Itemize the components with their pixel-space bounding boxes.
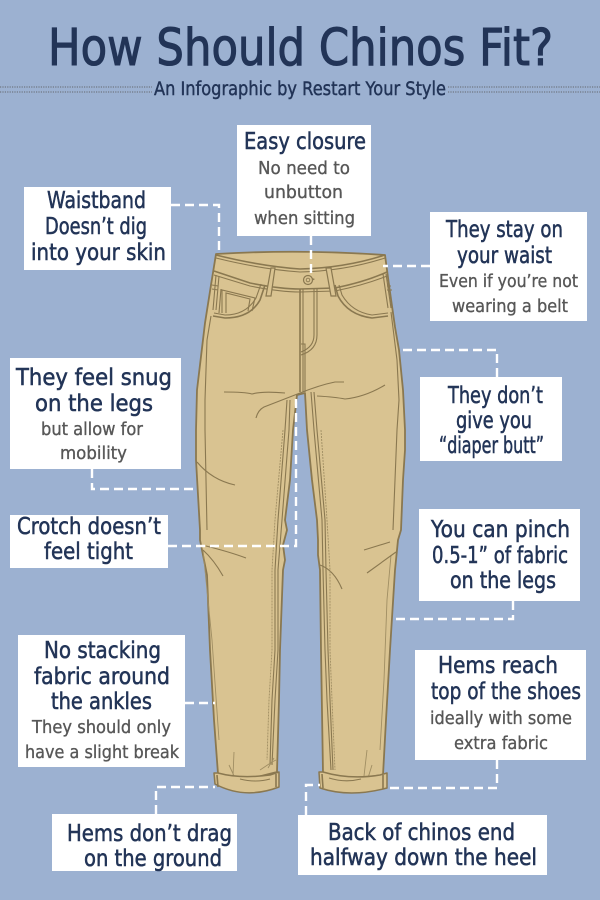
- fly: [299, 289, 301, 392]
- callout: hems don't drag: on the ground: [84, 844, 222, 872]
- callout: easy closure: No need to: [258, 158, 350, 179]
- callout: crotch: Crotch doesn’t: [17, 512, 161, 540]
- callout: easy closure: [237, 125, 371, 236]
- callout: hems reach: extra fabric: [454, 733, 548, 754]
- callout: no stacking: have a slight break: [25, 742, 180, 763]
- callout: hems reach: [415, 650, 586, 760]
- callout: snug on the legs: on the legs: [35, 389, 153, 417]
- callout: no stacking: the ankles: [51, 687, 152, 715]
- callout: snug on the legs: mobility: [60, 443, 127, 464]
- callout: diaper butt: give you: [456, 406, 532, 434]
- button: [304, 276, 315, 284]
- right leg inseam stitching: [311, 392, 331, 770]
- callout: snug on the legs: [10, 358, 181, 469]
- callout: stay on waist: Even if you’re not: [439, 271, 578, 292]
- callout: pinch fabric: on the legs: [450, 566, 556, 594]
- crease folds: [224, 392, 285, 394]
- callout: hems don't drag: [52, 814, 237, 872]
- callout: diaper butt: “diaper butt”: [439, 431, 544, 459]
- subtitle with dotted rules: [0, 79, 600, 100]
- callout: easy closure: unbutton: [264, 182, 343, 203]
- leader lines: [92, 205, 513, 815]
- side seams: [205, 316, 211, 530]
- callout: no stacking: They should only: [31, 717, 171, 738]
- callout: no stacking: [18, 635, 185, 767]
- callout: no stacking: fabric around: [34, 662, 170, 690]
- callout: easy closure: when sitting: [254, 208, 355, 229]
- callout: no stacking: No stacking: [44, 636, 161, 664]
- callout: stay on waist: They stay on: [445, 215, 563, 243]
- callout: pinch fabric: You can pinch: [430, 515, 570, 543]
- knee wrinkles: [197, 462, 235, 485]
- callout: easy closure: Easy closure: [244, 127, 366, 155]
- left leg inseam stitching: [272, 400, 290, 765]
- waistband seams: [216, 255, 385, 269]
- callout: back of chinos: [298, 815, 547, 875]
- coin pocket: [222, 290, 255, 313]
- callout: crotch: [10, 512, 168, 568]
- front pockets: [213, 285, 265, 318]
- subtitle with dotted rules: An Infographic by Restart Your Style: [154, 79, 446, 100]
- callout: crotch: feel tight: [44, 537, 133, 565]
- callout: waistband: Doesn’t dig: [45, 212, 147, 240]
- illustration: chinos: [196, 252, 405, 793]
- side belt loops: [212, 275, 219, 310]
- callout: diaper butt: They don’t: [447, 381, 543, 409]
- callout: waistband: Waistband: [47, 186, 146, 214]
- trouser body: [196, 252, 405, 780]
- callout: snug on the legs: They feel snug: [15, 363, 172, 391]
- belt loops: [266, 268, 275, 296]
- callout: hems reach: Hems reach: [438, 651, 558, 679]
- callout: hems don't drag: Hems don’t drag: [67, 819, 232, 847]
- callout: pinch fabric: [419, 509, 580, 601]
- callout: back of chinos: Back of chinos end: [328, 818, 515, 846]
- lower leg wrinkles: [229, 752, 276, 778]
- callout: stay on waist: your waist: [457, 241, 552, 269]
- callout: stay on waist: wearing a belt: [452, 296, 568, 317]
- right cuff: [319, 772, 387, 793]
- callout: back of chinos: halfway down the heel: [310, 843, 537, 871]
- left cuff: [214, 772, 279, 793]
- callout: diaper butt: [420, 377, 562, 461]
- callout: stay on waist: [430, 212, 587, 321]
- callout: waistband: [24, 186, 171, 270]
- callout: hems reach: ideally with some: [430, 708, 572, 729]
- callout: waistband: into your skin: [31, 238, 166, 266]
- callout: snug on the legs: but allow for: [41, 419, 144, 440]
